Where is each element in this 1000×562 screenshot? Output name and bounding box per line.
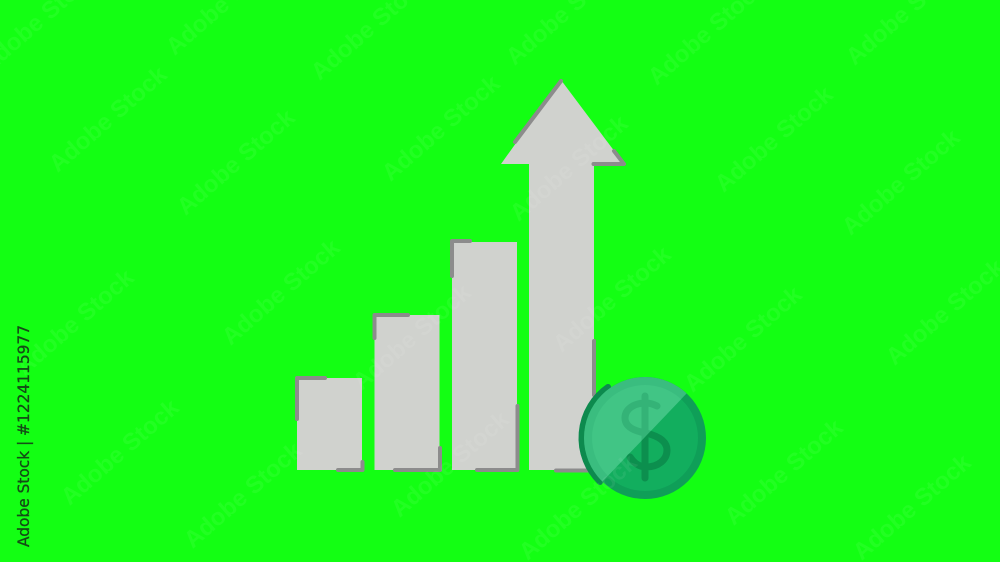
watermark pattern: Adobe Stock: [548, 241, 677, 358]
watermark pattern: Adobe Stock: [837, 124, 966, 241]
bar chart: [297, 80, 624, 470]
coin back edge: [582, 387, 608, 482]
watermark pattern: Adobe Stock: [172, 104, 301, 221]
coin highlight: [584, 377, 686, 482]
watermark pattern: Adobe Stock: [679, 281, 808, 398]
watermark pattern: Adobe Stock: [217, 234, 346, 351]
watermark pattern: Adobe Stock: [386, 406, 515, 523]
growth arrow: [501, 80, 624, 470]
watermark pattern: Adobe Stock: [179, 437, 308, 554]
watermark pattern: Adobe Stock: [44, 61, 173, 178]
watermark pattern: Adobe Stock: [11, 264, 140, 381]
bar 2: [374, 315, 440, 470]
watermark pattern: Adobe Stock: [720, 414, 849, 531]
dollar sign: [626, 431, 670, 482]
watermark pattern: Adobe Stock: [377, 70, 506, 187]
icon: dollar coin: [582, 377, 706, 499]
bar 1: [297, 378, 362, 470]
watermark pattern: Adobe Stock: [710, 81, 839, 198]
watermark pattern: Adobe Stock: [505, 110, 634, 227]
watermark pattern: Adobe Stock: [348, 279, 477, 396]
bar 3: [452, 241, 518, 470]
stock id label: Adobe Stock | #1224115977: [14, 325, 33, 547]
watermark pattern: Adobe Stock: [56, 394, 185, 511]
